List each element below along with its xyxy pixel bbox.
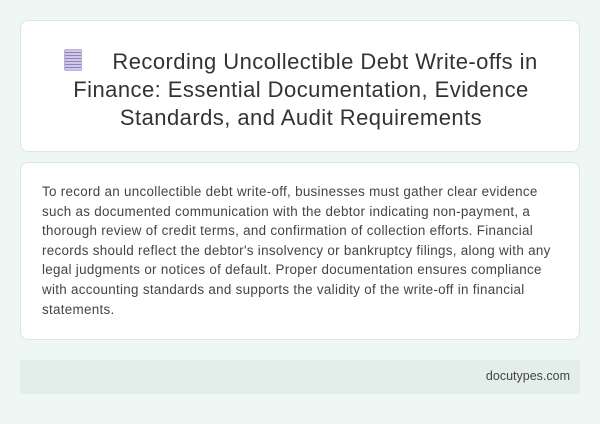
- icon: document: [64, 49, 82, 71]
- footer text: docutypes.com: [486, 369, 570, 383]
- footer bar: [20, 360, 580, 394]
- title: Recording Uncollectible Debt Write-offs in Finance: Essential Documentation, Evidence Standards, and Audit Requirements: [73, 49, 538, 130]
- panel: description card: [20, 162, 580, 340]
- panel: title card: [20, 20, 580, 152]
- text block: description: To record an uncollectible debt write-off, businesses must gather clear evidence such as documented communication with the debtor indicating non-payment, a thorough review of credit terms, and confirmation of collection efforts. Financial records should reflect the debtor's insolvency or bankruptcy filings, along with any legal judgments or notices of default. Proper documentation ensures compliance with accounting standards and supports the validity of the write-off in financial statements.: [42, 184, 551, 317]
